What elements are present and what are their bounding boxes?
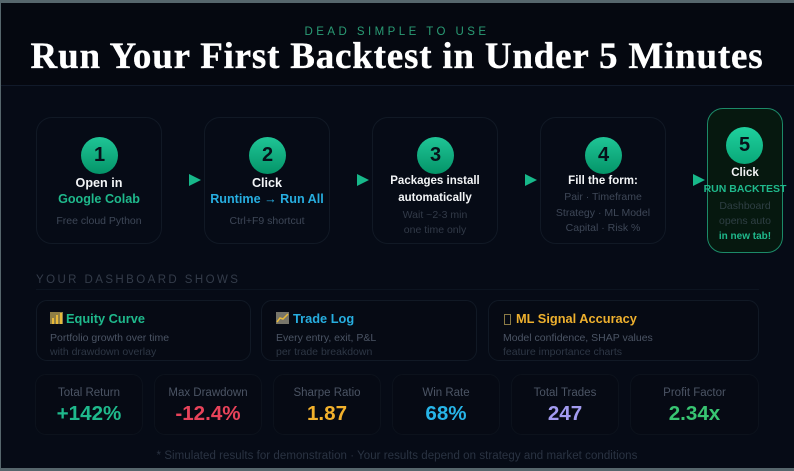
step 3 heading [390,175,480,204]
stat: sharpe ratio [273,374,381,435]
title: Run Your First Backtest in Under 5 Minutes [31,36,763,77]
step 4 card [540,117,666,244]
arrow 2 [357,174,369,186]
step 3 number [417,137,454,174]
step 1 number: 1 [94,144,105,166]
label: Profit Factor [663,387,726,399]
panel: ml signal accuracy [488,300,759,361]
value: 1.87 [307,402,347,425]
stat: total trades [511,374,619,435]
equity title: Equity Curve [66,311,145,326]
step 4 number: 4 [598,144,609,166]
step 2 heading: Click [252,176,282,190]
label: Total Return [58,387,120,399]
arrow 3 [525,174,537,186]
ml title: ML Signal Accuracy [516,311,637,326]
step 2 card [204,117,330,244]
step 3 note: Wait ~2-3 min [403,209,467,221]
value: 2.34x [669,402,720,425]
stat: profit factor [630,374,759,435]
section heading: YOUR DASHBOARD SHOWS [36,274,240,286]
step 5 heading: Click [731,167,759,179]
ml icon placeholder [504,314,511,325]
trade log line 2: per trade breakdown [276,346,372,358]
step 5 number [726,127,763,164]
stat: win rate [392,374,500,435]
value: 68% [425,402,467,425]
arrow 1 [189,174,201,186]
step 2 number [249,137,286,174]
value: +142% [57,402,121,425]
panel: equity curve [36,300,251,361]
step 1 number [81,137,118,174]
step 3 number: 3 [430,144,441,166]
value: 247 [548,402,582,425]
label: Win Rate [422,387,470,399]
step 4 fields [556,191,650,234]
footnote: * Simulated results for demonstration · Your results depend on strategy and market conditions [157,450,637,462]
step 2 action: Runtime → Run All [210,192,324,206]
step 4 heading: Fill the form: [568,175,638,187]
eyebrow: DEAD SIMPLE TO USE [304,26,490,38]
step 3 note [402,209,467,236]
stat: total return [35,374,143,435]
label: Sharpe Ratio [293,387,361,399]
label: Max Drawdown [168,387,248,399]
trade log icon [276,312,289,324]
step 5 note: Dashboard [719,200,771,212]
stat: max drawdown [154,374,262,435]
label: Total Trades [534,387,596,399]
step 3 heading: automatically [398,192,472,204]
step 5 action: RUN BACKTEST [704,183,786,195]
step 2 note: Ctrl+F9 shortcut [230,215,304,227]
step 4 fields: Strategy · ML Model [556,206,650,218]
step 5 note: opens auto [719,215,771,227]
step 1 link text: Google Colab [58,192,140,206]
step 1 card [36,117,162,244]
step 3 card [372,117,498,244]
step 4 fields: Capital · Risk % [566,222,640,234]
step 3 note: one time only [404,224,466,236]
ml line 2: feature importance charts [503,346,622,358]
step 3 heading: Packages install [390,175,480,187]
equity line 2: with drawdown overlay [50,346,156,358]
step 2 number: 2 [262,144,273,166]
step 1 heading: Open in [76,176,122,190]
trade log title: Trade Log [293,311,354,326]
step 4 fields: Pair · Timeframe [564,191,642,203]
arrow 4 [693,174,705,186]
step 5 highlight: in new tab! [719,231,771,242]
value: -12.4% [175,402,241,425]
step 1 note: Free cloud Python [56,215,142,227]
step 5 number: 5 [739,134,750,156]
trade log line 1: Every entry, exit, P&L [276,332,376,344]
step 5 card [707,108,783,253]
panel: trade log [261,300,477,361]
ml line 1: Model confidence, SHAP values [503,332,653,344]
step 4 number [585,137,622,174]
equity icon [50,312,63,324]
equity line 1: Portfolio growth over time [50,332,169,344]
step 5 note [719,200,771,227]
